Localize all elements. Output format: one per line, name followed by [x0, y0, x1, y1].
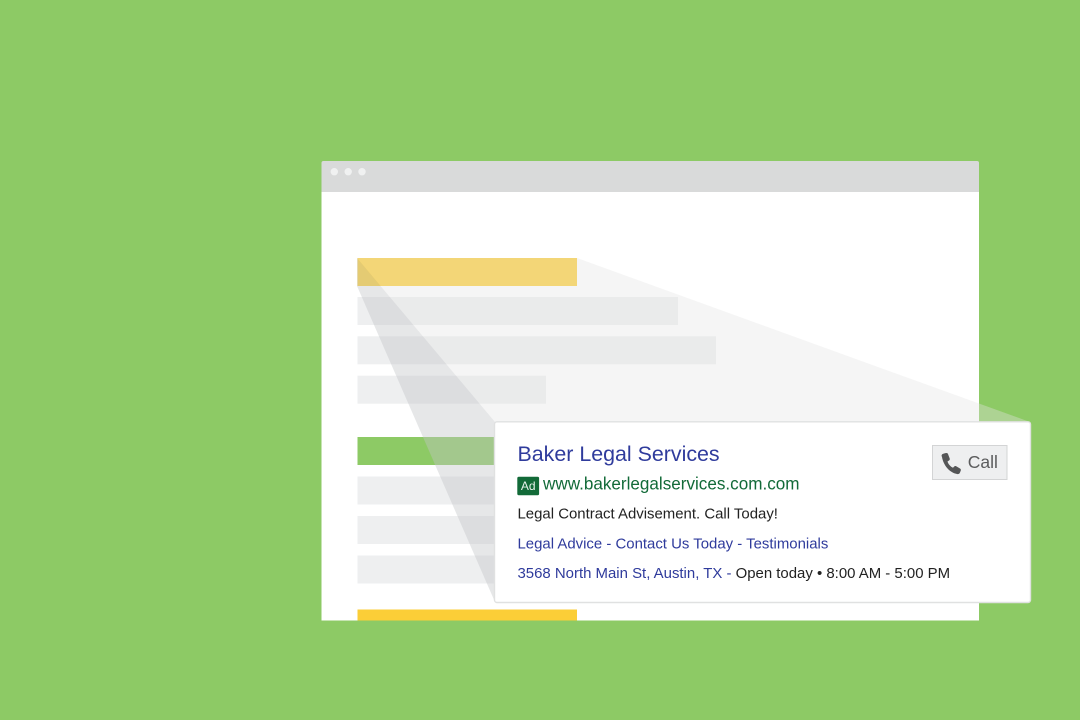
browser title bar	[322, 161, 979, 192]
zoom beam: left face	[357, 258, 495, 602]
ad headline: Baker Legal Services	[518, 442, 720, 466]
yellow result bar	[358, 610, 577, 620]
card panel	[494, 422, 1030, 602]
browser window	[322, 161, 979, 620]
description line: Legal Contract Advisement. Call Today!	[518, 506, 778, 522]
icon: phone	[942, 453, 961, 474]
ad card	[494, 422, 1030, 602]
grey text bars, group one	[358, 297, 716, 404]
search result bars	[358, 258, 716, 620]
zoom beam: top face	[357, 258, 1030, 422]
sitelinks: Legal Advice - Contact Us Today - Testimonials	[518, 536, 828, 552]
ad badge: Ad	[521, 479, 536, 493]
ad badge	[517, 477, 539, 495]
green result bar	[358, 437, 577, 465]
highlighted result bar	[358, 258, 577, 286]
call label: Call	[968, 452, 998, 472]
display url: www.bakerlegalservices.com.com	[542, 474, 800, 494]
call button	[932, 446, 1007, 480]
address and hours: 3568 North Main St, Austin, TX - Open today • 8:00 AM - 5:00 PM	[518, 565, 950, 582]
window control dots	[331, 168, 366, 175]
browser page body	[322, 190, 979, 620]
grey text bars, group two	[358, 476, 678, 584]
